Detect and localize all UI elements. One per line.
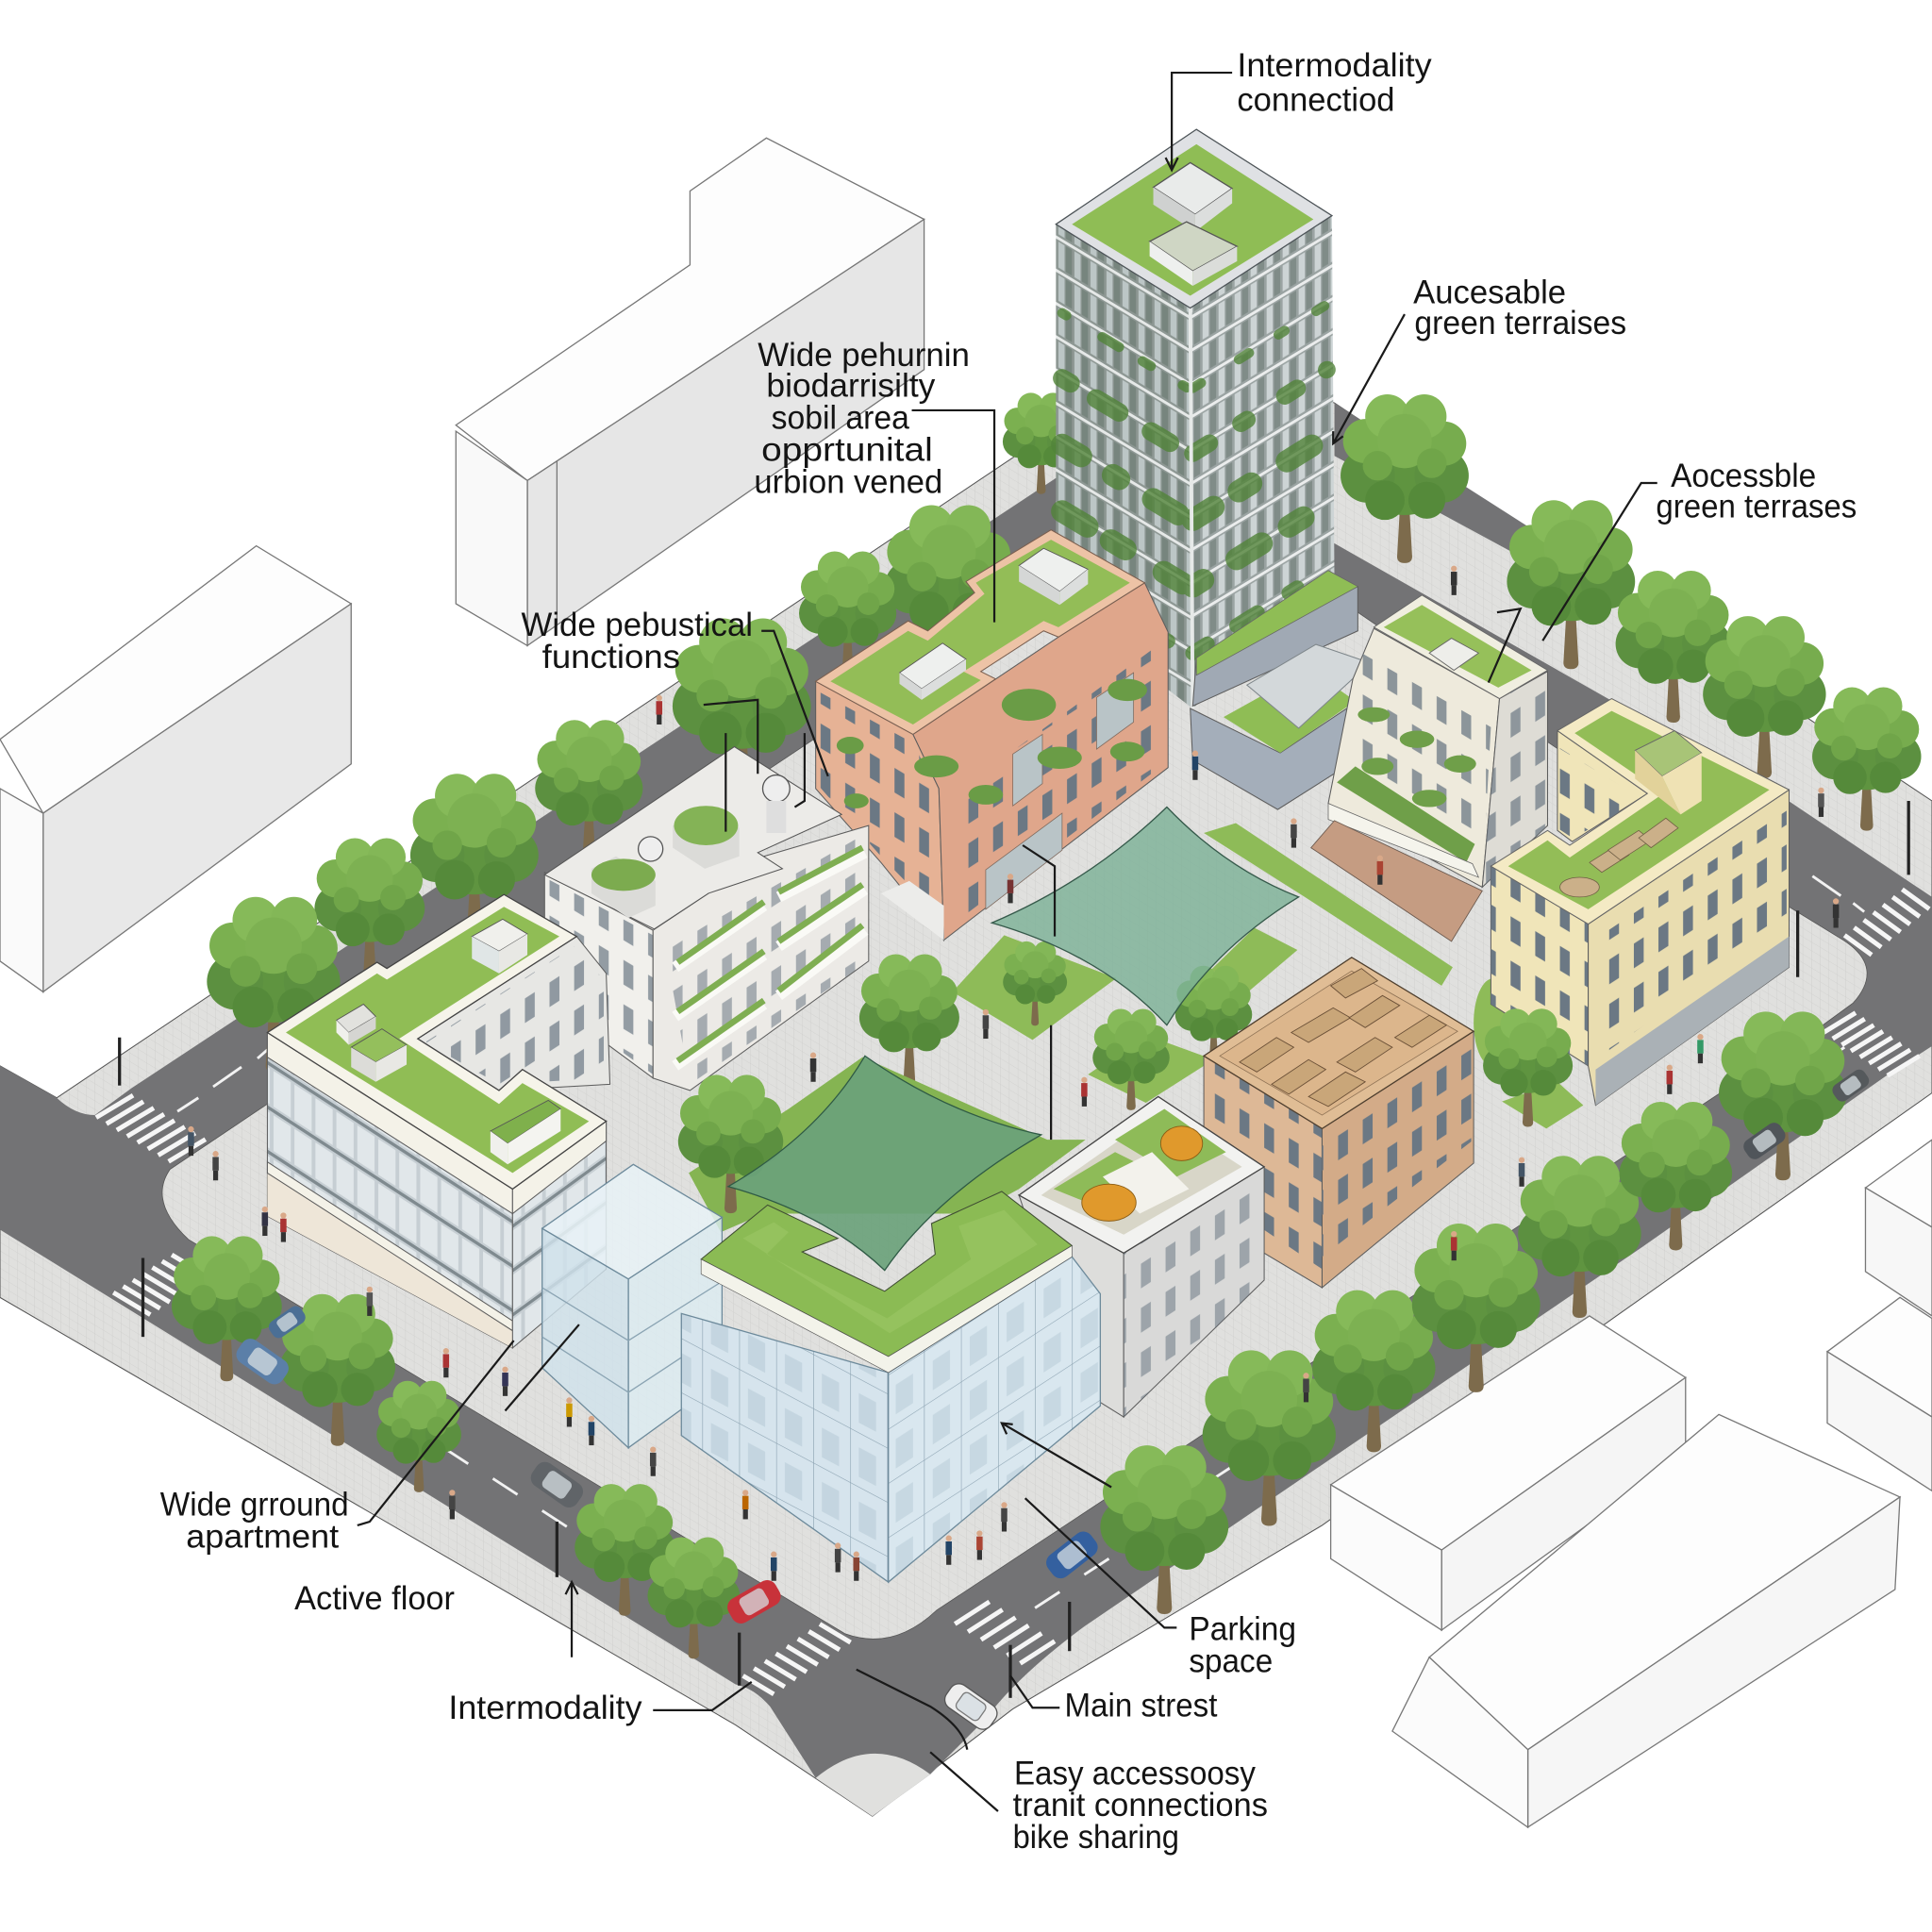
label: parking space bbox=[1189, 1610, 1296, 1679]
label: easy access bbox=[1013, 1755, 1268, 1856]
context blocks: right edge bbox=[1827, 1140, 1932, 1491]
label: active floor: Active floor bbox=[294, 1580, 455, 1617]
leader: plaza poles bbox=[1023, 845, 1055, 1140]
central block paving bbox=[162, 492, 1867, 1639]
context block: left bbox=[0, 546, 351, 991]
cars bbox=[232, 1067, 1872, 1733]
context block: upper centre bbox=[456, 138, 924, 645]
label: accessible terraces lower: green terrases bbox=[1656, 489, 1857, 525]
leader: biodiversity bbox=[912, 410, 994, 623]
tower roof pavilion bbox=[1154, 162, 1232, 232]
main glass building bbox=[681, 1191, 1100, 1582]
road lane markings bbox=[177, 876, 1864, 1607]
pink recesses bbox=[986, 673, 1134, 909]
white building balconies bbox=[675, 848, 865, 1066]
roof terrace furniture bbox=[1560, 818, 1678, 897]
label: biodiversity bbox=[754, 337, 970, 500]
road network bbox=[0, 403, 1932, 1816]
label: accessible terraces upper: green terraises bbox=[1414, 305, 1626, 341]
leader: intermodality bottom bbox=[566, 1582, 752, 1710]
white mid building bbox=[544, 747, 869, 1091]
tower podium bbox=[1191, 571, 1370, 809]
label: biodiversity: urbion vened bbox=[754, 463, 942, 500]
context block: lower right long bbox=[1392, 1414, 1900, 1827]
front garden bbox=[689, 1058, 1086, 1232]
bottom sidewalk wedge bbox=[816, 1754, 930, 1816]
pedestrians bbox=[188, 566, 1839, 1581]
tower roof skylight bbox=[1150, 222, 1237, 286]
ground canopy bbox=[1311, 821, 1482, 941]
label: functions: functions bbox=[542, 639, 680, 675]
green gardens bbox=[953, 823, 1583, 1128]
ground sidewalk bbox=[0, 355, 1932, 1816]
yellow building penthouse bbox=[1635, 731, 1702, 814]
green roof bbox=[701, 1191, 1072, 1357]
terrace building bbox=[1311, 595, 1547, 941]
label: accessible terraces upper: Aucesable bbox=[1413, 274, 1566, 310]
crosswalks bbox=[96, 890, 1929, 1694]
leader: accessible terraces upper bbox=[1333, 314, 1405, 443]
leader: functions bbox=[704, 631, 828, 832]
tan building bbox=[1204, 958, 1474, 1288]
podium glass stairs bbox=[1247, 644, 1370, 728]
leader: accessible terraces lower bbox=[1489, 483, 1657, 683]
terrace balconies bbox=[1337, 708, 1476, 862]
label: intermodality connection: Intermodality bbox=[1237, 47, 1432, 84]
label: accessible terraces upper bbox=[1413, 274, 1626, 341]
leader: intermodality connection bbox=[1166, 73, 1232, 170]
trees: north-west row bbox=[207, 392, 1079, 1073]
tree near front garden bbox=[678, 1074, 783, 1213]
label: parking space: Parking bbox=[1189, 1610, 1296, 1647]
yellow building bbox=[1491, 699, 1789, 1106]
label: easy access: tranit connections bbox=[1013, 1787, 1268, 1824]
label: biodiversity: biodarrisilty bbox=[766, 368, 936, 405]
leader: ground apartment bbox=[358, 1324, 579, 1525]
grey building bbox=[1019, 1096, 1264, 1417]
label: accessible terraces lower: Aocessble bbox=[1671, 458, 1816, 494]
pink balconies bbox=[837, 679, 1147, 808]
label: biodiversity: Wide pehurnin bbox=[758, 337, 970, 374]
trees: south-east row bbox=[1100, 1011, 1847, 1614]
label: functions bbox=[521, 607, 753, 675]
label: main street: Main strest bbox=[1064, 1687, 1218, 1724]
label: intermodality connection: connectiod bbox=[1237, 82, 1395, 119]
trees: outer row north-east bbox=[1341, 394, 1922, 831]
tower bbox=[1056, 129, 1335, 708]
label: easy access: bike sharing bbox=[1013, 1819, 1179, 1856]
label: accessible terraces lower bbox=[1656, 458, 1857, 525]
street lamps bbox=[120, 801, 1908, 1698]
context block: lower right middle bbox=[1331, 1316, 1686, 1630]
front-left glass building bbox=[267, 894, 610, 1348]
label: ground apartment: apartment bbox=[186, 1518, 339, 1555]
label: biodiversity: sobil area bbox=[772, 400, 909, 437]
transparent glass box bbox=[542, 1164, 722, 1448]
leader: easy access bbox=[857, 1670, 998, 1811]
pink building bbox=[816, 530, 1168, 941]
tower planting bbox=[1062, 305, 1327, 653]
label: intermodality connection bbox=[1237, 47, 1432, 119]
white roof equipment bbox=[591, 775, 790, 918]
leader: main street bbox=[1010, 1675, 1059, 1707]
label: ground apartment: Wide grround bbox=[160, 1487, 349, 1524]
tan roof furniture bbox=[1240, 969, 1446, 1107]
inner trees bbox=[859, 941, 1573, 1126]
label: parking space: space bbox=[1189, 1642, 1273, 1679]
tower roof garden bbox=[1072, 144, 1313, 295]
left roof units bbox=[337, 1004, 375, 1045]
leader: parking space bbox=[1002, 1424, 1176, 1627]
grey building roof domes bbox=[1082, 1126, 1203, 1221]
trees: south-west row bbox=[172, 1236, 740, 1658]
label: biodiversity: opprtunital bbox=[761, 431, 933, 468]
label: intermodality bottom: Intermodality bbox=[448, 1690, 642, 1726]
pink roof units bbox=[899, 643, 966, 700]
label: functions: Wide pebustical bbox=[521, 607, 753, 643]
label: easy access: Easy accessoosy bbox=[1014, 1755, 1256, 1791]
rear shade canopy bbox=[991, 808, 1299, 1025]
front shade canopy bbox=[728, 1056, 1041, 1271]
label: ground apartment bbox=[160, 1487, 349, 1555]
